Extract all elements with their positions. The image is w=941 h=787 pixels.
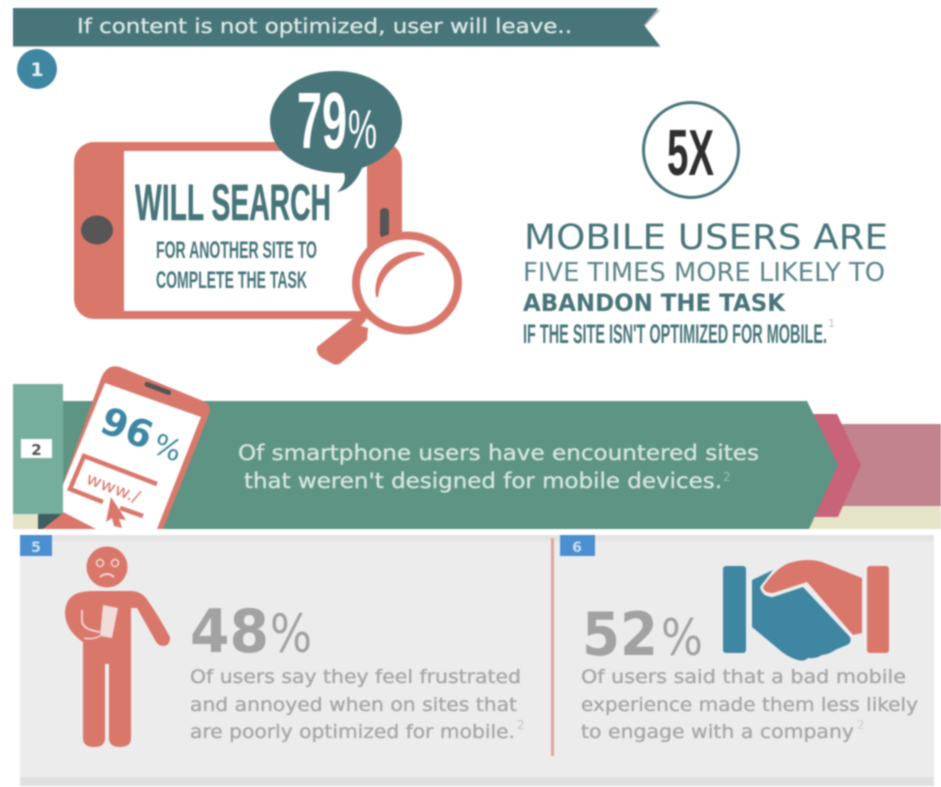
title text: If content is not optimized, user will leave.. — [77, 14, 572, 38]
title banner — [13, 8, 661, 47]
speech bubble: 79%: % — [348, 98, 377, 160]
phone body — [74, 142, 402, 319]
icon: magnifying glass — [317, 236, 458, 365]
badge 6: 6 — [572, 540, 582, 556]
icon: tilted phone with 96%: % — [148, 427, 187, 469]
band text: that weren't designed for mobile devices. — [244, 469, 722, 493]
text block: engage — [581, 666, 918, 743]
text block: frustrated: are poorly optimized for mobile. — [190, 721, 515, 743]
5X circle: 5X — [667, 116, 714, 189]
phone screen text: will search: WILL SEARCH — [135, 174, 331, 231]
5X circle — [644, 102, 738, 198]
band text: 2 — [723, 470, 731, 484]
text block: frustrated — [190, 666, 525, 743]
panel: 96% banner — [13, 366, 941, 529]
band text: Of smartphone users have encountered sites — [238, 441, 759, 465]
stat: 48% — [190, 597, 312, 667]
badge 6 — [560, 535, 595, 556]
text block: mobile users — [523, 218, 888, 349]
text block: engage: to engage with a company — [581, 721, 854, 743]
icon: handshake — [723, 560, 889, 661]
icon: frustrated person with phone — [65, 546, 170, 747]
panel: grey statistics — [20, 535, 934, 786]
band text — [238, 441, 759, 493]
text block: frustrated: Of users say they feel frustrated — [190, 666, 521, 688]
text block: frustrated: 2 — [517, 718, 525, 732]
text block: engage: experience made them less likely — [581, 694, 918, 716]
speech bubble: 79% — [270, 71, 402, 192]
stat: 52% — [582, 600, 703, 670]
stat: 52%: % — [661, 609, 703, 667]
left tab with number 2: 2 — [31, 441, 42, 459]
number badge 1: 1 — [30, 59, 44, 81]
text block: mobile users: MOBILE USERS ARE — [524, 218, 888, 258]
speech bubble: 79%: 79 — [297, 76, 347, 165]
icon: tilted phone with 96%: www./ — [83, 469, 143, 508]
text block: engage: Of users said that a bad mobile — [581, 666, 906, 688]
illustration: landscape phone with magnifier and 79% bubble — [74, 71, 458, 365]
phone screen text: will search: COMPLETE THE TASK — [156, 267, 307, 294]
icon: tilted phone with 96% — [43, 366, 210, 529]
phone screen text: will search: FOR ANOTHER SITE TO — [156, 237, 317, 264]
badge 5: 5 — [31, 540, 41, 556]
right ribbon end — [808, 414, 941, 529]
stat: 48%: 48 — [190, 597, 269, 667]
badge 5 — [20, 535, 52, 556]
phone screen text: will search — [135, 174, 331, 294]
text block: mobile users: 1 — [828, 317, 835, 330]
number badge 1 — [17, 49, 57, 89]
arrow band — [63, 401, 838, 529]
stat: 52%: 52 — [582, 600, 658, 670]
stat: 48%: % — [270, 604, 312, 665]
icon: tilted phone with 96%: 96 — [95, 398, 159, 458]
text block: frustrated: and annoyed when on sites that — [190, 694, 517, 716]
left tab with number 2 — [13, 384, 63, 529]
text block: mobile users: ABANDON THE TASK — [523, 289, 786, 317]
text block: mobile users: FIVE TIMES MORE LIKELY TO — [523, 258, 885, 288]
text block: engage: 2 — [857, 718, 865, 732]
